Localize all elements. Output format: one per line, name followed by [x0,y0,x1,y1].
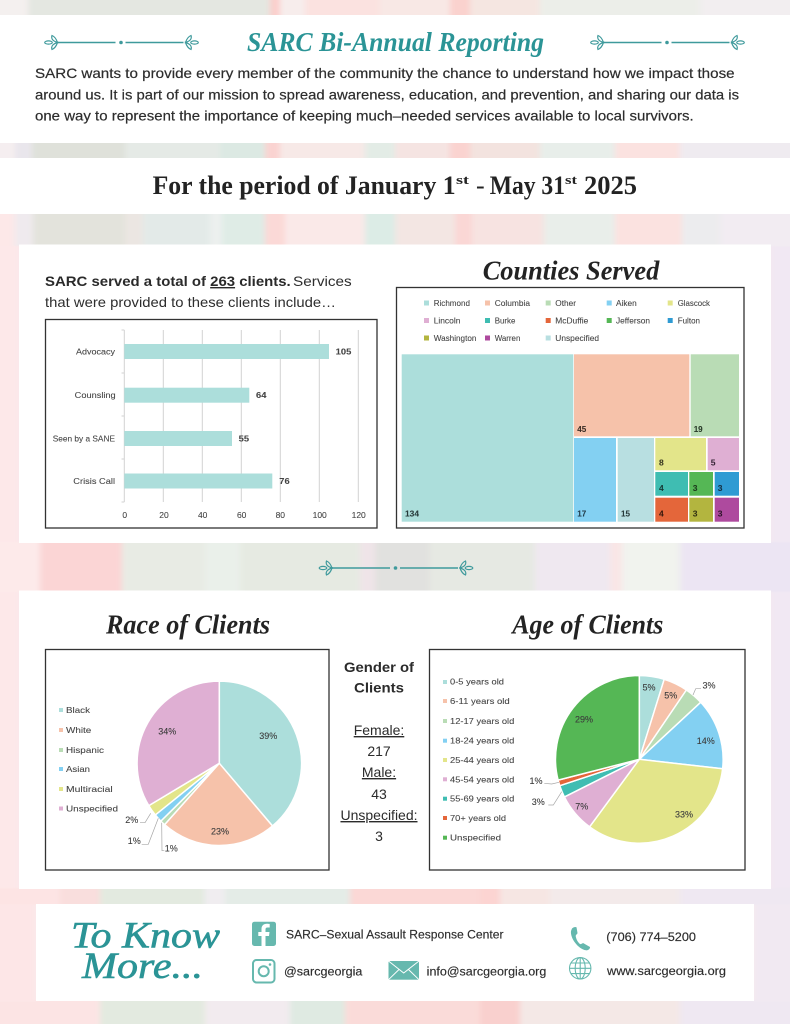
race pie labels: 34% [158,727,176,737]
age legend: 45-54 years old [450,774,515,784]
treemap cells: 17 [577,509,587,519]
icon: globe [570,958,591,979]
icon: phone [571,927,590,950]
age legend: 12-17 years old [450,716,515,726]
age legend: Unspecified [450,833,501,843]
treemap legend: Burke [495,316,516,326]
race pie labels: 1% [165,844,178,854]
heading: counties served: Counties Served [483,256,660,286]
age pie labels: 3% [702,681,716,691]
treemap legend: Jefferson [616,316,650,326]
treemap legend: Fulton [678,316,700,326]
services summary text: Services [293,273,352,289]
text block: gender of clients: 43 [371,786,387,802]
age legend: 6-11 years old [450,696,510,706]
age pie labels: 7% [575,801,588,811]
treemap cells: 3 [718,509,723,519]
race pie labels: 39% [259,731,277,741]
icon: facebook [252,922,276,946]
race pie labels: 2% [125,815,138,825]
treemap cells: 45 [577,424,587,434]
race pie labels: 1% [128,836,141,846]
age legend: 0-5 years old [450,677,504,687]
heading: age of clients: Age of Clients [510,609,663,639]
text block: gender of clients: Male: [362,764,396,780]
treemap legend: Other [555,298,576,308]
text block: gender of clients: Female: [354,722,404,738]
intro paragraph [35,65,739,124]
panel: services and counties [19,244,771,543]
age legend: 55-69 years old [450,794,515,804]
panel: reporting period [0,158,790,214]
age pie labels: 3% [532,797,545,807]
intro paragraph: SARC wants to provide every member of the community the chance to understand how we impact those [35,65,735,81]
race legend: Multiracial [66,784,113,794]
services summary text: SARC served a total of 263 clients. [45,273,291,289]
period heading: st [456,172,470,187]
bar: advocacy: 105 [336,347,352,357]
age legend: 25-44 years old [450,755,515,765]
bar: counseling: Counsling [75,390,116,400]
icon: email envelope [388,961,419,980]
treemap cells: 15 [621,509,630,519]
text block: gender of clients: 217 [367,743,391,759]
x axis labels: 100 [313,510,327,520]
bar: seen by a SANE: 55 [239,433,249,443]
treemap cells: 19 [694,424,703,434]
treemap cells: 8 [659,457,664,467]
treemap legend [424,298,711,343]
chart: age pie [430,650,745,870]
race legend: Black [66,705,91,715]
treemap cells: 3 [693,483,698,493]
period heading: st [565,172,578,187]
treemap legend: Richmond [434,298,470,308]
age pie labels: 29% [575,714,593,724]
treemap legend: McDuffie [555,316,589,326]
treemap cells: 5 [711,457,716,467]
bar: counseling: 64 [256,390,267,400]
text block: gender of clients: 3 [375,828,383,844]
bar chart: services [46,320,377,528]
race pie slices [137,681,302,845]
x axis labels: 20 [159,510,169,520]
period heading: May 31 [490,171,565,200]
bar: advocacy: Advocacy [76,347,116,357]
bar: crisis call: 76 [279,476,290,486]
panel: contact footer [36,904,754,1001]
services summary text: that were provided to these clients include… [45,294,336,310]
race legend: Hispanic [66,745,105,755]
heading: to know more: To Know [71,916,220,957]
ornament: header left [45,36,198,50]
period heading: 2025 [584,171,637,200]
text block: gender of clients: Gender of [344,659,414,675]
bar: crisis call [73,474,290,488]
race legend: White [66,725,92,735]
intro paragraph: one way to represent the importance of keeping much–needed services available to local survivors. [35,108,694,124]
treemap cells: 3 [718,483,723,493]
contact: facebook name: SARC–Sexual Assault Response Center [286,930,504,942]
text block: gender of clients [340,659,418,844]
period heading: - [476,171,485,200]
age legend [443,677,515,843]
heading: to know more: More... [81,946,203,987]
race legend: Unspecified [66,804,118,814]
bar: crisis call: Crisis Call [73,476,115,486]
treemap legend: Glascock [678,298,711,308]
bar: seen by a SANE [53,431,249,446]
contact: website: www.sarcgeorgia.org [606,966,726,978]
treemap cells: 134 [405,509,419,519]
treemap cells: 4 [659,483,664,493]
treemap legend: Aiken [616,298,637,308]
x axis labels: 80 [276,510,285,520]
treemap legend: Unspecified [555,333,599,343]
heading: to know more [71,916,220,987]
race pie labels [125,727,277,854]
panel: intro banner [0,15,790,143]
treemap cells [402,354,739,522]
contact: phone number: (706) 774–5200 [606,932,696,944]
age pie labels: 5% [664,690,677,700]
contact: instagram handle: @sarcgeorgia [284,967,363,979]
age pie labels [529,681,716,819]
race pie labels: 23% [211,826,229,836]
x axis labels: 40 [198,510,208,520]
text block: gender of clients: Unspecified: [340,807,418,823]
x axis labels: 120 [352,510,366,520]
age pie slices [555,676,723,843]
age legend: 70+ years old [450,813,506,823]
age pie labels: 1% [529,776,543,786]
text block: gender of clients: Clients [354,680,404,696]
period heading [153,171,637,200]
treemap legend: Lincoln [434,316,461,326]
icon: instagram [253,960,274,982]
treemap cells: 3 [693,509,698,519]
contact: email: info@sarcgeorgia.org [427,967,546,979]
treemap legend: Columbia [495,298,530,308]
age legend: 18-24 years old [450,736,515,746]
heading: race of clients: Race of Clients [105,609,270,639]
x axis labels: 0 [122,510,127,520]
race legend: Asian [66,764,90,774]
age pie labels: 5% [642,683,656,693]
treemap cells: 4 [659,509,664,519]
chart: race pie [46,650,329,870]
header title: SARC Bi-Annual Reporting [247,27,544,57]
bar: advocacy [76,344,352,359]
x axis labels: 60 [237,510,247,520]
bar: counseling [75,388,267,403]
x axis labels [122,510,366,520]
period heading: For the period of January 1 [153,171,456,200]
bar: seen by a SANE: Seen by a SANE [53,433,115,443]
intro paragraph: around us. It is part of our mission to spread awareness, education, and prevention, and sharing our data is [35,86,739,102]
treemap legend: Washington [434,333,477,343]
age pie labels: 14% [697,736,715,746]
age pie labels: 33% [675,809,693,819]
race legend [59,705,118,814]
services summary text [45,273,352,310]
treemap: counties [396,288,744,528]
ornament: header right [591,36,744,50]
panel: demographics [19,590,771,889]
ornament: section divider [319,561,473,575]
treemap legend: Warren [495,333,521,343]
